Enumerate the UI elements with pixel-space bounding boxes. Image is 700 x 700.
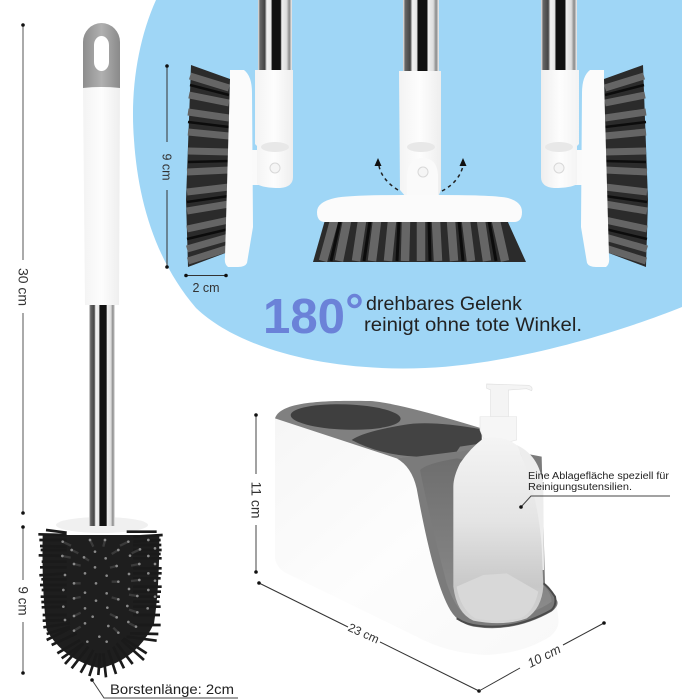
dimension: brush length 30 cm: 30 cm: [16, 268, 32, 306]
holder square cup opening: [352, 423, 482, 457]
left brush view: [186, 0, 293, 267]
callout: storage surface: Eine Ablagefläche speziell für: [528, 471, 670, 482]
rotation arrow right: [442, 158, 466, 191]
bottle body: [453, 437, 543, 623]
callout: storage surface: Reinigungsutensilien.: [528, 482, 632, 493]
holder round cup opening: [290, 402, 401, 432]
brush white grip: [83, 88, 120, 305]
dimension: bristle height 2 cm: [184, 274, 228, 295]
holder white body base: [275, 418, 559, 655]
left brush joint shading: [261, 142, 289, 152]
bottle pump head: [487, 384, 532, 417]
left brush pivot: [270, 163, 280, 173]
holder and bottle: [275, 384, 559, 655]
dimension: brush head 9 cm: [16, 525, 30, 675]
holder tray dark edge: [457, 583, 555, 627]
dimension: holder height 11 cm: 11 cm: [248, 481, 264, 519]
dimension: bristle height 2 cm: 2 cm: [192, 281, 220, 295]
holder inner grey recess: [397, 445, 558, 628]
dimension: holder length 23 cm: [257, 581, 481, 693]
dimension: holder height 11 cm: [248, 413, 264, 574]
centre brush bristles: [313, 220, 526, 262]
blue background panel: [133, 0, 682, 368]
callout: bristle length: Borstenlänge: 2cm: [110, 681, 234, 697]
dimension: holder depth 10 cm: [479, 621, 606, 691]
brush grey cap with hanging hole: [83, 23, 120, 88]
headline: 180 degrees: 180: [263, 290, 345, 344]
brush white disc: [56, 517, 148, 533]
soap bottle: [453, 384, 544, 623]
right brush view: [541, 0, 648, 267]
centre brush plate: [317, 195, 522, 222]
bottle cap: [480, 417, 517, 442]
dimension: brush head height 9 cm: 9 cm: [160, 153, 174, 181]
dimension: holder depth 10 cm: 10 cm: [525, 641, 563, 671]
centre brush view: [313, 0, 526, 262]
callout: bristle length: [90, 678, 238, 698]
dimension: holder length 23 cm: 23 cm: [346, 620, 381, 646]
centre brush handle: [399, 71, 441, 197]
headline description: [364, 294, 582, 336]
holder grey top rim: [275, 401, 482, 458]
left brush joint tab: [250, 150, 262, 185]
callout: storage surface: [519, 471, 670, 509]
centre brush pivot: [407, 158, 438, 197]
left brush pole: [258, 0, 292, 71]
right brush pole: [541, 0, 577, 71]
bottle halo wall: [517, 445, 544, 570]
headline description: reinigt ohne tote Winkel.: [364, 315, 582, 336]
dimension: brush head height 9 cm: [160, 64, 174, 269]
centre brush pole: [403, 0, 439, 72]
brush steel rod: [89, 304, 115, 525]
left brush plate: [225, 70, 253, 267]
left brush handle: [255, 70, 293, 188]
centre brush joint shading: [407, 142, 435, 152]
left brush bristles: [186, 65, 230, 267]
rotation arrow left: [374, 158, 398, 190]
headline description: drehbares Gelenk: [366, 294, 523, 315]
toilet brush: [38, 23, 163, 677]
dimension: brush head 9 cm: 9 cm: [16, 586, 30, 616]
brush silicone head: [38, 530, 163, 677]
dimension: brush length 30 cm: [16, 23, 32, 515]
right brush mirrored head: [541, 65, 648, 267]
